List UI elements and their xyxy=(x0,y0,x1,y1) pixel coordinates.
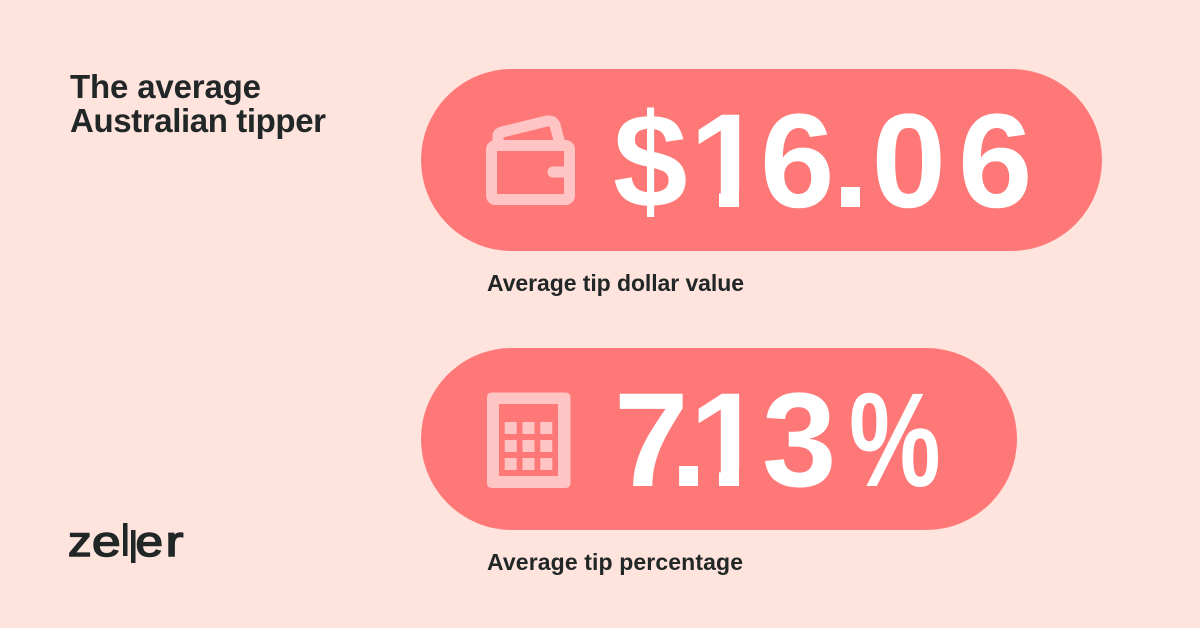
icon: calculator xyxy=(487,392,570,488)
big number: $16.06: $ xyxy=(613,87,688,236)
big number: $16.06: 1 xyxy=(690,87,764,236)
big number: $16.06: 6 xyxy=(958,87,1033,236)
logo: zeller: z xyxy=(68,517,92,566)
logo: zeller: e xyxy=(92,518,121,566)
big number: 7.13%: 7 xyxy=(614,366,689,515)
big number: 7.13%: 3 xyxy=(762,366,837,515)
panel: average tip dollar value xyxy=(421,69,1102,296)
caption: percentage: Average tip percentage xyxy=(487,549,743,575)
title: The average xyxy=(70,68,261,105)
icon: wallet xyxy=(492,121,570,200)
title: Australian tipper xyxy=(70,102,326,139)
big number: $16.06 xyxy=(614,108,1028,217)
panel: average tip percentage xyxy=(421,348,1017,575)
title xyxy=(70,68,326,139)
big number: 7.13% xyxy=(620,392,938,488)
big number: $16.06: 0 xyxy=(872,87,946,236)
big number: $16.06: . xyxy=(832,87,869,236)
pill: dollar value xyxy=(421,69,1102,251)
logo: zeller xyxy=(68,517,183,566)
big number: 7.13%: . xyxy=(670,366,707,515)
caption: dollar value: Average tip dollar value xyxy=(487,270,744,296)
pill: percentage xyxy=(421,348,1017,530)
big number: 7.13%: 1 xyxy=(690,366,764,515)
logo: zeller: r xyxy=(166,518,183,566)
big number: $16.06: 6 xyxy=(760,87,835,236)
logo: zeller: e xyxy=(136,517,163,565)
big number: 7.13%: % xyxy=(849,366,941,515)
